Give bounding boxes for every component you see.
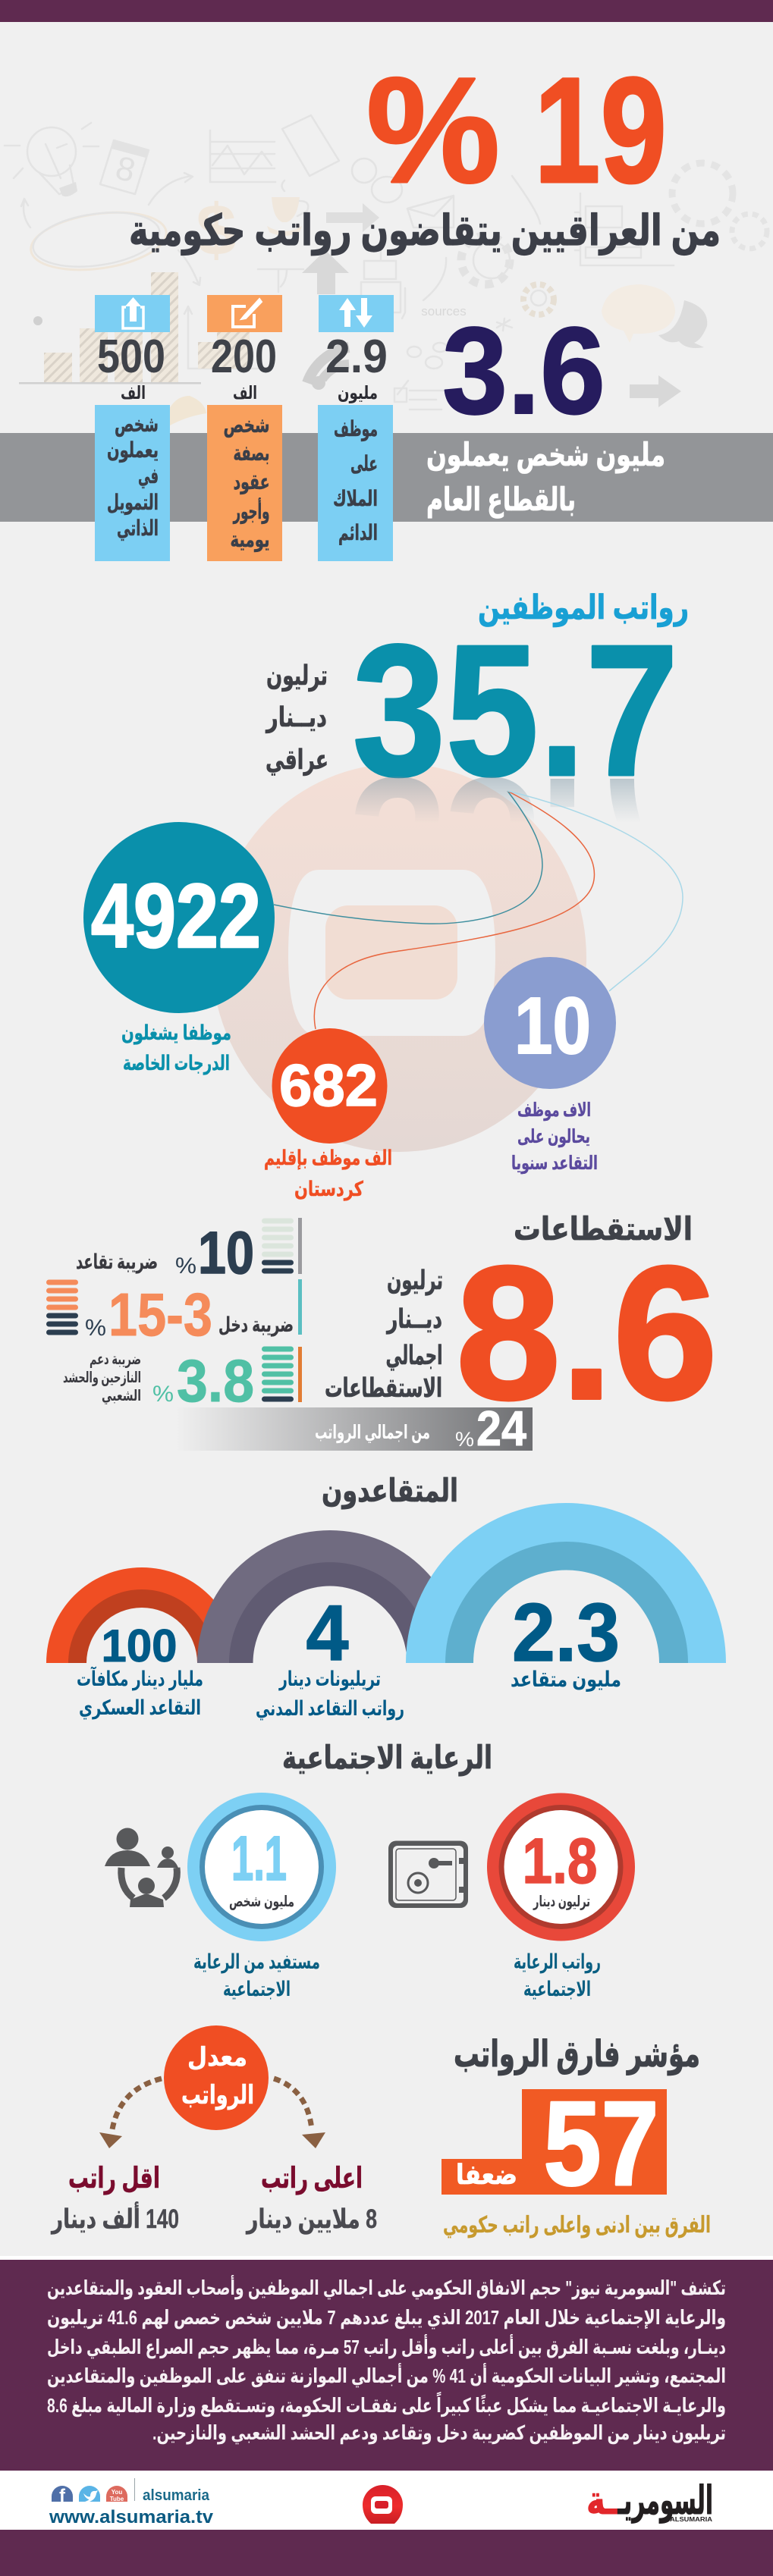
description box: الدائم xyxy=(338,521,378,545)
panel: summary text: والرعاية الإجتماعية خلال العام 2017 الذي يبلغ عددهم 7 ملايين شخص خصص لهم 41.6 تريليون xyxy=(47,2306,726,2330)
caption: retirees xyxy=(511,1100,598,1175)
description box: موظف xyxy=(334,417,378,441)
dial: 1.1 million: 1.1 xyxy=(231,1823,287,1894)
website: www.alsumaria.tv xyxy=(49,2507,214,2527)
stacked bars xyxy=(262,1347,294,1401)
unit label: total deductions xyxy=(325,1266,443,1403)
description box: التمويل xyxy=(107,491,159,515)
value 3.8 percent: % xyxy=(152,1382,174,1407)
description box: الملاك xyxy=(333,487,378,510)
stat: 2.3 million retirees: 2.3 xyxy=(512,1586,620,1679)
heading: employee salaries: رواتب الموظفين xyxy=(478,589,689,627)
icon: youtube: You xyxy=(112,2489,122,2496)
heading: social welfare: الرعاية الاجتماعية xyxy=(282,1740,492,1777)
dial: 1.1 million: مليون شخص xyxy=(229,1894,294,1910)
dial: 1.8 trillion xyxy=(487,1793,635,1941)
gradient band: 24 percent of salaries: 24 xyxy=(476,1401,526,1456)
retirement tax row xyxy=(76,1218,302,1286)
arch: retirees count xyxy=(406,1503,726,1663)
grey band xyxy=(0,433,773,522)
highest salary: اعلى راتب xyxy=(261,2163,363,2195)
stat: 2.3 million retirees: مليون متقاعد xyxy=(511,1668,621,1692)
value 3.8 percent: 3.8 xyxy=(177,1347,254,1414)
brand logo xyxy=(586,2479,713,2524)
background doodles xyxy=(5,115,767,430)
caption: welfare salaries: الاجتماعية xyxy=(523,1978,591,2000)
label: الشعبي xyxy=(102,1388,141,1405)
description box: على xyxy=(350,452,378,475)
icon: edit xyxy=(207,295,282,332)
number 500: 500 xyxy=(97,331,165,383)
stat: 100 billion: التقاعد العسكري xyxy=(79,1696,201,1720)
background doodles: $ xyxy=(196,190,237,271)
description box: الذاتي xyxy=(117,516,159,541)
description box: يومية xyxy=(231,528,270,552)
reflection of 35.7: 35.7 xyxy=(351,739,680,950)
number 2.9: 2.9 xyxy=(325,331,388,383)
description box: في xyxy=(138,464,159,488)
top purple bar xyxy=(0,0,773,22)
dial: 1.8 trillion: 1.8 xyxy=(522,1825,598,1897)
doodle bar chart xyxy=(19,272,201,384)
circle: average salaries: معدل xyxy=(187,2043,247,2072)
bubble: 4922: 4922 xyxy=(91,865,261,967)
arch: military retirement xyxy=(46,1567,237,1663)
caption: welfare salaries xyxy=(514,1950,601,2000)
unit label: trillion Iraqi dinar xyxy=(265,660,328,776)
caption: Kurdistan: كردستان xyxy=(294,1178,363,1201)
band caption: بالقطاع العام xyxy=(426,482,576,519)
caption: welfare salaries: رواتب الرعاية xyxy=(514,1950,601,1974)
column: contracts 200 thousand xyxy=(207,295,282,561)
description box xyxy=(318,405,393,561)
description box: شخص xyxy=(115,413,159,437)
circle: average salaries: الرواتب xyxy=(181,2081,254,2110)
lowest salary xyxy=(50,2163,179,2235)
gradient band: 24 percent of salaries: من اجمالي الرواتب xyxy=(315,1422,430,1444)
label: النازحين والحشد xyxy=(63,1370,141,1386)
icon: safe xyxy=(388,1841,468,1908)
stat: 100 billion: 100 xyxy=(102,1621,178,1671)
brand logo: ـة xyxy=(586,2479,617,2523)
panel: summary text xyxy=(0,2260,773,2471)
description box: عقود xyxy=(234,470,270,494)
white separator xyxy=(0,2256,773,2260)
stat box: 57 times: ضعفا xyxy=(456,2159,517,2190)
caption: Kurdistan xyxy=(264,1147,392,1201)
icon: facebook: f xyxy=(59,2486,66,2506)
unit label: trillion Iraqi dinar: عراقي xyxy=(266,744,328,776)
stat: 4 trillion: تريليونات دينار xyxy=(278,1668,381,1691)
bubble: 682: 682 xyxy=(279,1052,378,1119)
heading: retirees: المتقاعدون xyxy=(322,1473,458,1510)
caption: Kurdistan: الف موظف بإقليم xyxy=(264,1147,392,1170)
arrow: to lowest salary xyxy=(99,2079,162,2148)
gradient band: 24 percent of salaries xyxy=(175,1401,533,1456)
dial: 1.1 million xyxy=(187,1793,336,1941)
icon: facebook xyxy=(52,2486,73,2506)
unit label: trillion Iraqi dinar: ديــنار xyxy=(265,701,327,733)
value 10 percent xyxy=(175,1219,254,1286)
stat: 100 billion xyxy=(77,1621,203,1720)
caption: special grades xyxy=(121,1021,231,1075)
caption: welfare beneficiaries: الاجتماعية xyxy=(223,1978,291,2000)
brand logo: ALSUMARIA xyxy=(670,2516,712,2523)
arrow: to highest salary xyxy=(274,2079,325,2148)
bubble: 10 xyxy=(484,957,616,1089)
bottom purple bar xyxy=(0,2530,773,2576)
caption: retirees: الاف موظف xyxy=(517,1100,591,1122)
description box xyxy=(95,405,170,561)
panel: footer xyxy=(0,2471,773,2530)
unit: الف xyxy=(121,383,146,403)
background doodles: sources xyxy=(421,304,467,318)
value 15-3 percent: 15-3 xyxy=(108,1281,212,1348)
label: ضريبة دخل xyxy=(218,1313,294,1337)
value 15-3 percent: % xyxy=(85,1314,106,1341)
label: ضريبة تقاعد xyxy=(76,1250,158,1274)
label xyxy=(63,1351,141,1405)
description box: يعملون xyxy=(107,438,159,463)
highest salary xyxy=(245,2163,377,2235)
center logo xyxy=(363,2485,403,2524)
bubble: 10: 10 xyxy=(514,981,591,1071)
stat: 100 billion: مليار دينار مكافآت xyxy=(77,1666,203,1691)
caption: welfare beneficiaries xyxy=(193,1950,320,2000)
heading: deductions: الاستقطاعات xyxy=(514,1211,693,1247)
band caption: مليون شخص يعملون xyxy=(426,437,665,474)
stat: 4 trillion: 4 xyxy=(306,1589,349,1677)
unit: مليون xyxy=(338,383,378,403)
band caption xyxy=(426,437,665,519)
stacked bars xyxy=(262,1218,294,1274)
unit: الف xyxy=(233,383,257,403)
unit label: total deductions: ديــنار xyxy=(386,1304,442,1335)
faded logo disc xyxy=(212,764,586,1152)
stat box: 57 times xyxy=(441,2077,667,2210)
caption: retirees: يحالون على xyxy=(517,1126,590,1148)
description box: بصفة xyxy=(234,441,270,465)
value 10 percent: 10 xyxy=(198,1219,254,1286)
arch: civil retirement xyxy=(197,1530,463,1663)
bubble: 4922 xyxy=(83,822,275,1013)
caption: special grades: موظفا يشغلون xyxy=(121,1021,231,1045)
stat: 4 trillion: رواتب التقاعد المدني xyxy=(256,1697,404,1721)
icon: youtube xyxy=(106,2486,127,2502)
stat: 4 trillion xyxy=(256,1589,404,1721)
stacked bars xyxy=(46,1280,78,1335)
income tax row xyxy=(46,1279,302,1348)
description box: وأجور xyxy=(232,497,270,524)
caption: welfare beneficiaries: مستفيد من الرعاية xyxy=(193,1950,320,1974)
social handle: alsumaria xyxy=(143,2487,210,2504)
unit label: trillion Iraqi dinar: ترليون xyxy=(266,660,328,692)
gradient band: 24 percent of salaries: % xyxy=(455,1428,474,1451)
description box xyxy=(207,405,282,561)
column: self-financed 500 thousand xyxy=(95,295,170,561)
big stat: 3.6 million: 3.6 xyxy=(442,301,605,440)
highest salary: 8 ملايين دينار xyxy=(245,2204,377,2235)
big stat: 19 percent: % xyxy=(366,46,500,214)
lowest salary: 140 ألف دينار xyxy=(50,2201,179,2235)
column: permanent staff 2.9 million xyxy=(318,295,394,561)
icon: twitter xyxy=(79,2486,100,2502)
stat: 8.6 trillion: 8.6 xyxy=(456,1227,718,1439)
big stat: 19 percent: 19 xyxy=(534,46,667,214)
big stat: 19 percent xyxy=(366,46,667,214)
label: ضريبة دعم xyxy=(90,1351,141,1368)
value 10 percent: % xyxy=(175,1253,196,1279)
bubble: 682 xyxy=(272,1028,387,1144)
caption: special grades: الدرجات الخاصة xyxy=(123,1052,230,1075)
unit label: total deductions: اجمالي xyxy=(385,1341,443,1371)
unit label: total deductions: الاستقطاعات xyxy=(325,1373,442,1403)
icon: up and down arrows xyxy=(319,295,394,332)
connector curves xyxy=(274,791,683,1029)
background doodles: 8 xyxy=(112,149,139,190)
icon: share xyxy=(95,295,170,332)
icon: youtube: Tube xyxy=(110,2496,124,2502)
lowest salary: اقل راتب xyxy=(68,2163,160,2195)
stat: 35.7 trillion: 35.7 xyxy=(352,606,678,815)
dial: 1.8 trillion: ترليون دينار xyxy=(533,1894,590,1910)
icon: family xyxy=(105,1828,178,1907)
number 200: 200 xyxy=(211,331,277,383)
description box: شخص xyxy=(223,413,270,438)
circle: average salaries xyxy=(164,2025,269,2130)
unit label: total deductions: ترليون xyxy=(387,1266,443,1296)
caption: retirees: التقاعد سنويا xyxy=(511,1153,598,1175)
displaced and PMF support tax row xyxy=(63,1347,302,1414)
stat box: 57 times: 57 xyxy=(543,2077,658,2210)
